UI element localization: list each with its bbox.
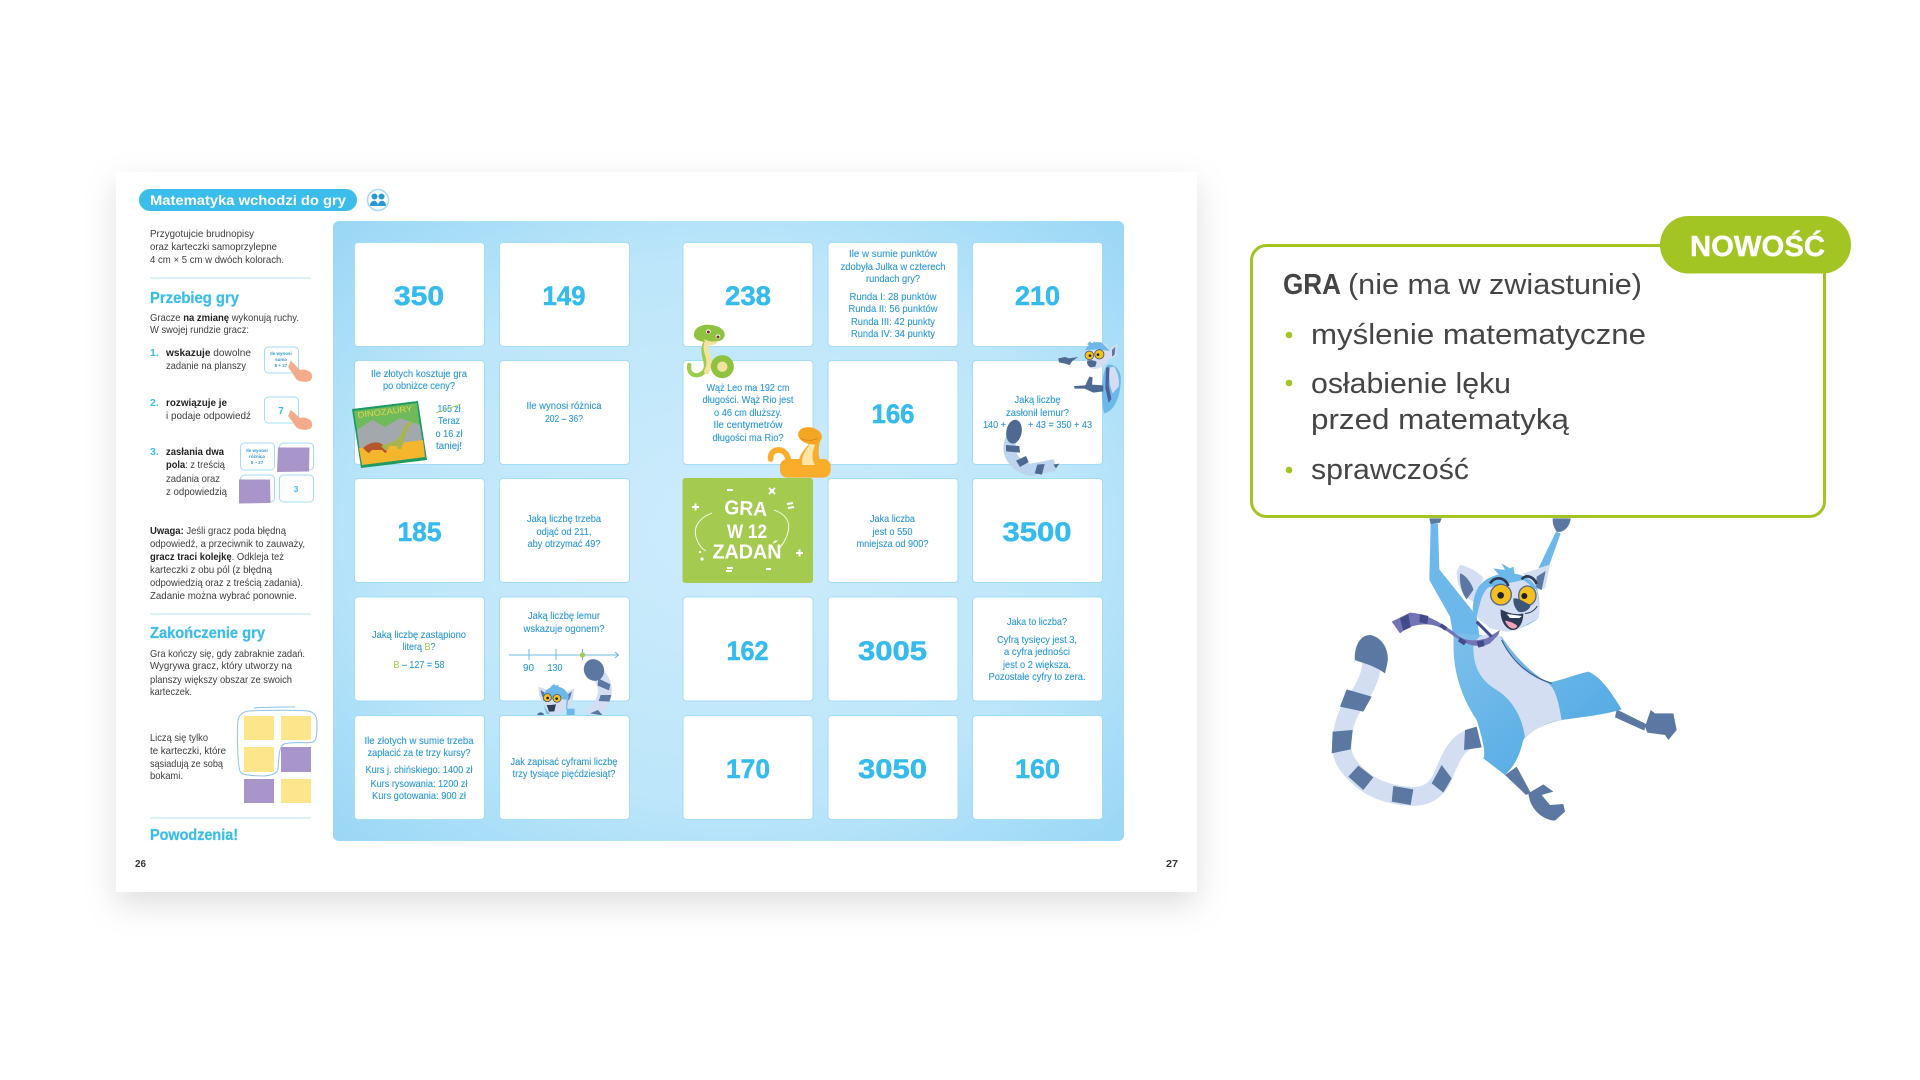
cell 170 <box>683 716 813 820</box>
end of game text <box>150 648 305 698</box>
icon: two players <box>368 190 388 210</box>
cell: courses question: Kurs rysowania: 1200 zł <box>370 778 468 790</box>
intro text: oraz karteczki samoprzylepne <box>150 241 277 253</box>
cell: courses question <box>354 716 484 820</box>
cell 160: 160 <box>1015 754 1060 784</box>
note: Uwaga: odpowiedzią oraz z treścią zadania). <box>150 577 303 589</box>
cell: subtraction question: odjąć od 211, <box>536 526 592 538</box>
cell: discount question: taniej! <box>436 440 462 452</box>
cell: what number question: Jaka to liczba? <box>1007 616 1067 628</box>
cell: number line question: wskazuje ogonem? <box>523 623 605 635</box>
cell: points question: Runda II: 56 punktów <box>848 303 938 315</box>
cell: covered number question: 140 + <box>983 419 1006 431</box>
cell: points question <box>828 242 958 346</box>
note: Uwaga: gracz traci kolejkę. Odkleja też <box>150 551 284 563</box>
step 2 <box>150 397 311 429</box>
cell: snake question <box>683 360 813 464</box>
cell: letter B question: Jaką liczbę zastąpiono <box>372 629 466 641</box>
torso <box>1453 633 1622 775</box>
cell: covered number question <box>972 360 1102 464</box>
cell: what number question: jest o 2 większa. <box>1002 659 1071 671</box>
heading: Przebieg gry: Przebieg gry <box>150 290 239 307</box>
cell: courses question: Kurs j. chińskiego: 1400 zł <box>366 764 473 776</box>
cell 210: 210 <box>1015 281 1060 311</box>
game box: Dinozaury: DINOZAURY <box>357 403 413 420</box>
end of game text: Wygrywa gracz, który utworzy na <box>150 660 292 672</box>
cell: difference question <box>500 360 630 464</box>
cell: points question: zdobyła Julka w czterech <box>840 261 946 273</box>
badge: NOWOŚĆ: NOWOŚĆ <box>1690 229 1825 263</box>
cell 3005: 3005 <box>858 636 927 666</box>
cell: subtraction question: aby otrzymać 49? <box>528 538 601 550</box>
cell: number line question: Jaką liczbę lemur <box>528 610 600 622</box>
step 3: zadania oraz <box>166 473 220 485</box>
cell 3500 <box>972 478 1102 582</box>
bullet: mathematical thinking: myślenie matematyczne <box>1311 319 1646 351</box>
step 1: 1. <box>150 347 159 359</box>
note: Uwaga <box>150 525 305 602</box>
heading: Zakończenie gry: Zakończenie gry <box>150 625 265 642</box>
centre tile: GRA W 12 ZADAŃ: ZADAŃ <box>712 540 782 564</box>
cell: discount question: 165 zł <box>438 403 461 415</box>
step 1: zadanie na planszy <box>166 360 247 372</box>
tail <box>1332 635 1482 805</box>
icon: hand <box>289 411 311 429</box>
cell: covered number question: Jaką liczbę <box>1014 394 1061 406</box>
cell: covered number question: + 43 = 350 + 43 <box>1028 419 1092 431</box>
cell: letter B question <box>354 597 484 701</box>
cell 185: 185 <box>398 517 442 547</box>
cell: what number question: a cyfra jedności <box>1004 646 1070 658</box>
number line: 130 <box>548 662 563 674</box>
intro to turn: W swojej rundzie gracz: <box>150 324 249 336</box>
centre tile: GRA W 12 ZADAŃ <box>682 478 813 583</box>
cell: snake question: długości. Wąż Rio jest <box>702 394 794 406</box>
cell 149 <box>500 242 630 346</box>
cell: subtraction question <box>500 478 630 582</box>
cell: 550 question: Jaka liczba <box>870 513 915 525</box>
callout frame <box>1252 246 1824 516</box>
end of game text: Gra kończy się, gdy zabraknie zadań. <box>150 648 305 660</box>
pointing lemur <box>1058 341 1121 413</box>
cell 238: 238 <box>725 281 771 311</box>
cell: write in digits question: trzy tysiące pięćdziesiąt? <box>512 768 616 780</box>
step 3: z odpowiedzią <box>166 486 227 498</box>
bullet: reducing fear: przed matematyką <box>1311 404 1570 436</box>
step 2: 2. <box>150 397 159 409</box>
cell: 550 question: mniejsza od 900? <box>856 538 929 550</box>
step 1: suma <box>275 357 287 362</box>
cell 350 <box>354 242 484 346</box>
step 2: i podaje odpowiedź <box>166 410 251 422</box>
note: Uwaga: karteczki z obu pól (z błędną <box>150 564 272 576</box>
sticky notes text <box>150 732 226 782</box>
cell 166: 166 <box>872 399 914 429</box>
cell: snake question: Wąż Leo ma 192 cm <box>706 382 790 394</box>
cell: write in digits question: Jak zapisać cyframi liczbę <box>510 756 618 768</box>
cell: courses question: Kurs gotowania: 900 zł <box>372 790 467 802</box>
title pill: Matematyka wchodzi do gry <box>150 192 346 208</box>
cell: snake question: Ile centymetrów <box>714 419 783 431</box>
note: Uwaga: odpowiedź, a przeciwnik to zauważy, <box>150 538 305 550</box>
cell: difference question: 202 – 36? <box>545 413 583 425</box>
cell 3050 <box>828 716 958 820</box>
intro text: 4 cm × 5 cm w dwóch kolorach. <box>150 254 284 266</box>
step 3: różnica <box>249 454 265 459</box>
cell 149: 149 <box>542 281 586 311</box>
callout: new game <box>1252 216 1851 516</box>
step 1 <box>150 347 311 381</box>
cell 350: 350 <box>394 281 444 311</box>
green snake <box>689 325 731 375</box>
cell: 550 question: jest o 550 <box>872 526 913 538</box>
cell: courses question: Ile złotych w sumie trzeba <box>364 735 474 747</box>
cell: write in digits question <box>500 716 630 820</box>
cell: letter B question: literą B? <box>402 641 436 653</box>
step 3: 3. <box>150 446 159 458</box>
number line: 90 <box>523 662 534 674</box>
cell 3500: 3500 <box>1002 517 1072 547</box>
intro text <box>150 228 284 266</box>
badge: NOWOŚĆ <box>1660 216 1851 274</box>
cell 170: 170 <box>726 754 770 784</box>
head <box>1457 563 1550 632</box>
cell: discount question: Teraz <box>438 415 460 427</box>
step 3 <box>150 443 314 504</box>
legs and feet <box>1505 709 1677 821</box>
page number 27: 27 <box>1166 858 1178 870</box>
end of game text: planszy większy obszar ze swoich <box>150 674 292 686</box>
cell: subtraction question: Jaką liczbę trzeba <box>527 513 601 525</box>
cell: snake question: o 46 cm dłuższy. <box>714 407 782 419</box>
cell 162 <box>683 597 813 701</box>
step 3: pola: z treścią <box>166 459 225 471</box>
intro to turn: Gracze na zmianę wykonują ruchy. <box>150 312 299 324</box>
closing: Powodzenia: Powodzenia! <box>150 827 238 844</box>
cell: what number question: Cyfrą tysięcy jest 3, <box>997 634 1077 646</box>
cell: discount question: o 16 zł <box>436 428 463 440</box>
scarf <box>1392 613 1500 648</box>
cell 162: 162 <box>726 636 768 666</box>
bullet: agency: sprawczość <box>1311 454 1469 486</box>
left column: rules <box>135 189 388 870</box>
step 1: wskazuje dowolne <box>165 347 251 359</box>
bullet: reducing fear: osłabienie lęku <box>1311 368 1511 400</box>
intro to turn <box>150 312 299 336</box>
small lemur with tail (number line) <box>537 656 611 720</box>
book spread page <box>116 172 1197 892</box>
sticky notes text: te karteczki, które <box>150 745 226 757</box>
cell 3005 <box>828 597 958 701</box>
end of game text: karteczek. <box>150 686 192 698</box>
lemur tail over question <box>1004 419 1059 475</box>
cell: what number question: Pozostałe cyfry to zera. <box>988 671 1086 683</box>
arms <box>1429 518 1571 640</box>
cell: points question: Ile w sumie punktów <box>849 248 937 260</box>
cell: points question: Runda IV: 34 punkty <box>851 328 936 340</box>
cell: difference question: Ile wynosi różnica <box>526 400 602 412</box>
sticky notes text: bokami. <box>150 770 183 782</box>
cell: courses question: zapłacić za te trzy kursy? <box>368 747 471 759</box>
cell: 550 question <box>828 478 958 582</box>
cell 160 <box>972 716 1102 820</box>
sticky notes text: sąsiadują ze sobą <box>150 758 223 770</box>
cell: points question: rundach gry? <box>866 273 920 285</box>
cell 3050: 3050 <box>858 754 927 784</box>
orange snake <box>771 425 831 478</box>
cell: what number question <box>972 597 1102 701</box>
step 3: 5 – 27 <box>251 460 264 465</box>
bullet: reducing fear <box>1286 368 1570 436</box>
cell 166 <box>828 360 958 464</box>
step 2: 7 <box>278 406 284 417</box>
cell 185 <box>354 478 484 582</box>
note: Uwaga: Uwaga: Jeśli gracz poda błędną <box>150 525 286 537</box>
cell: covered number question: zasłonił lemur? <box>1006 407 1069 419</box>
callout heading: (nie ma w zwiastunie) <box>1348 269 1642 301</box>
step 2: rozwiązuje je <box>166 397 227 409</box>
page number 26: 26 <box>135 858 146 870</box>
intro text: Przygotujcie brudnopisy <box>150 228 255 240</box>
cell: discount question: po obniżce ceny? <box>383 380 455 392</box>
cell: snake question: długości ma Rio? <box>712 432 784 444</box>
sticky notes text: Liczą się tylko <box>150 732 208 744</box>
centre tile: GRA W 12 ZADAŃ: GRA <box>724 497 768 521</box>
callout heading: GRA <box>1283 269 1341 301</box>
cell 238 <box>683 242 813 346</box>
cell: letter B question: B – 127 = 58 <box>394 659 445 671</box>
game board <box>333 221 1124 841</box>
number line <box>509 649 618 674</box>
sticky notes diagram <box>237 707 317 803</box>
note: Uwaga: Zadanie można wybrać ponownie. <box>150 590 297 602</box>
big lemur mascot <box>1332 518 1677 821</box>
cell 210 <box>972 242 1102 346</box>
step 1: Ile wynosi <box>270 351 292 356</box>
step 3: 3 <box>294 484 299 494</box>
title pill <box>139 189 357 211</box>
cell: points question: Runda III: 42 punkty <box>851 316 936 328</box>
step 3: Ile wynosi <box>246 448 268 453</box>
cell: points question: Runda I: 28 punktów <box>850 291 937 303</box>
cell: discount question <box>352 360 484 468</box>
cell: number line question <box>500 597 630 701</box>
icon: hand <box>289 362 311 381</box>
cell: discount question: Ile złotych kosztuje gra <box>371 368 467 380</box>
step 3: zasłania dwa <box>166 446 224 458</box>
centre tile: GRA W 12 ZADAŃ: W 12 <box>727 522 767 543</box>
step 1: 5 + 27 <box>275 363 288 368</box>
